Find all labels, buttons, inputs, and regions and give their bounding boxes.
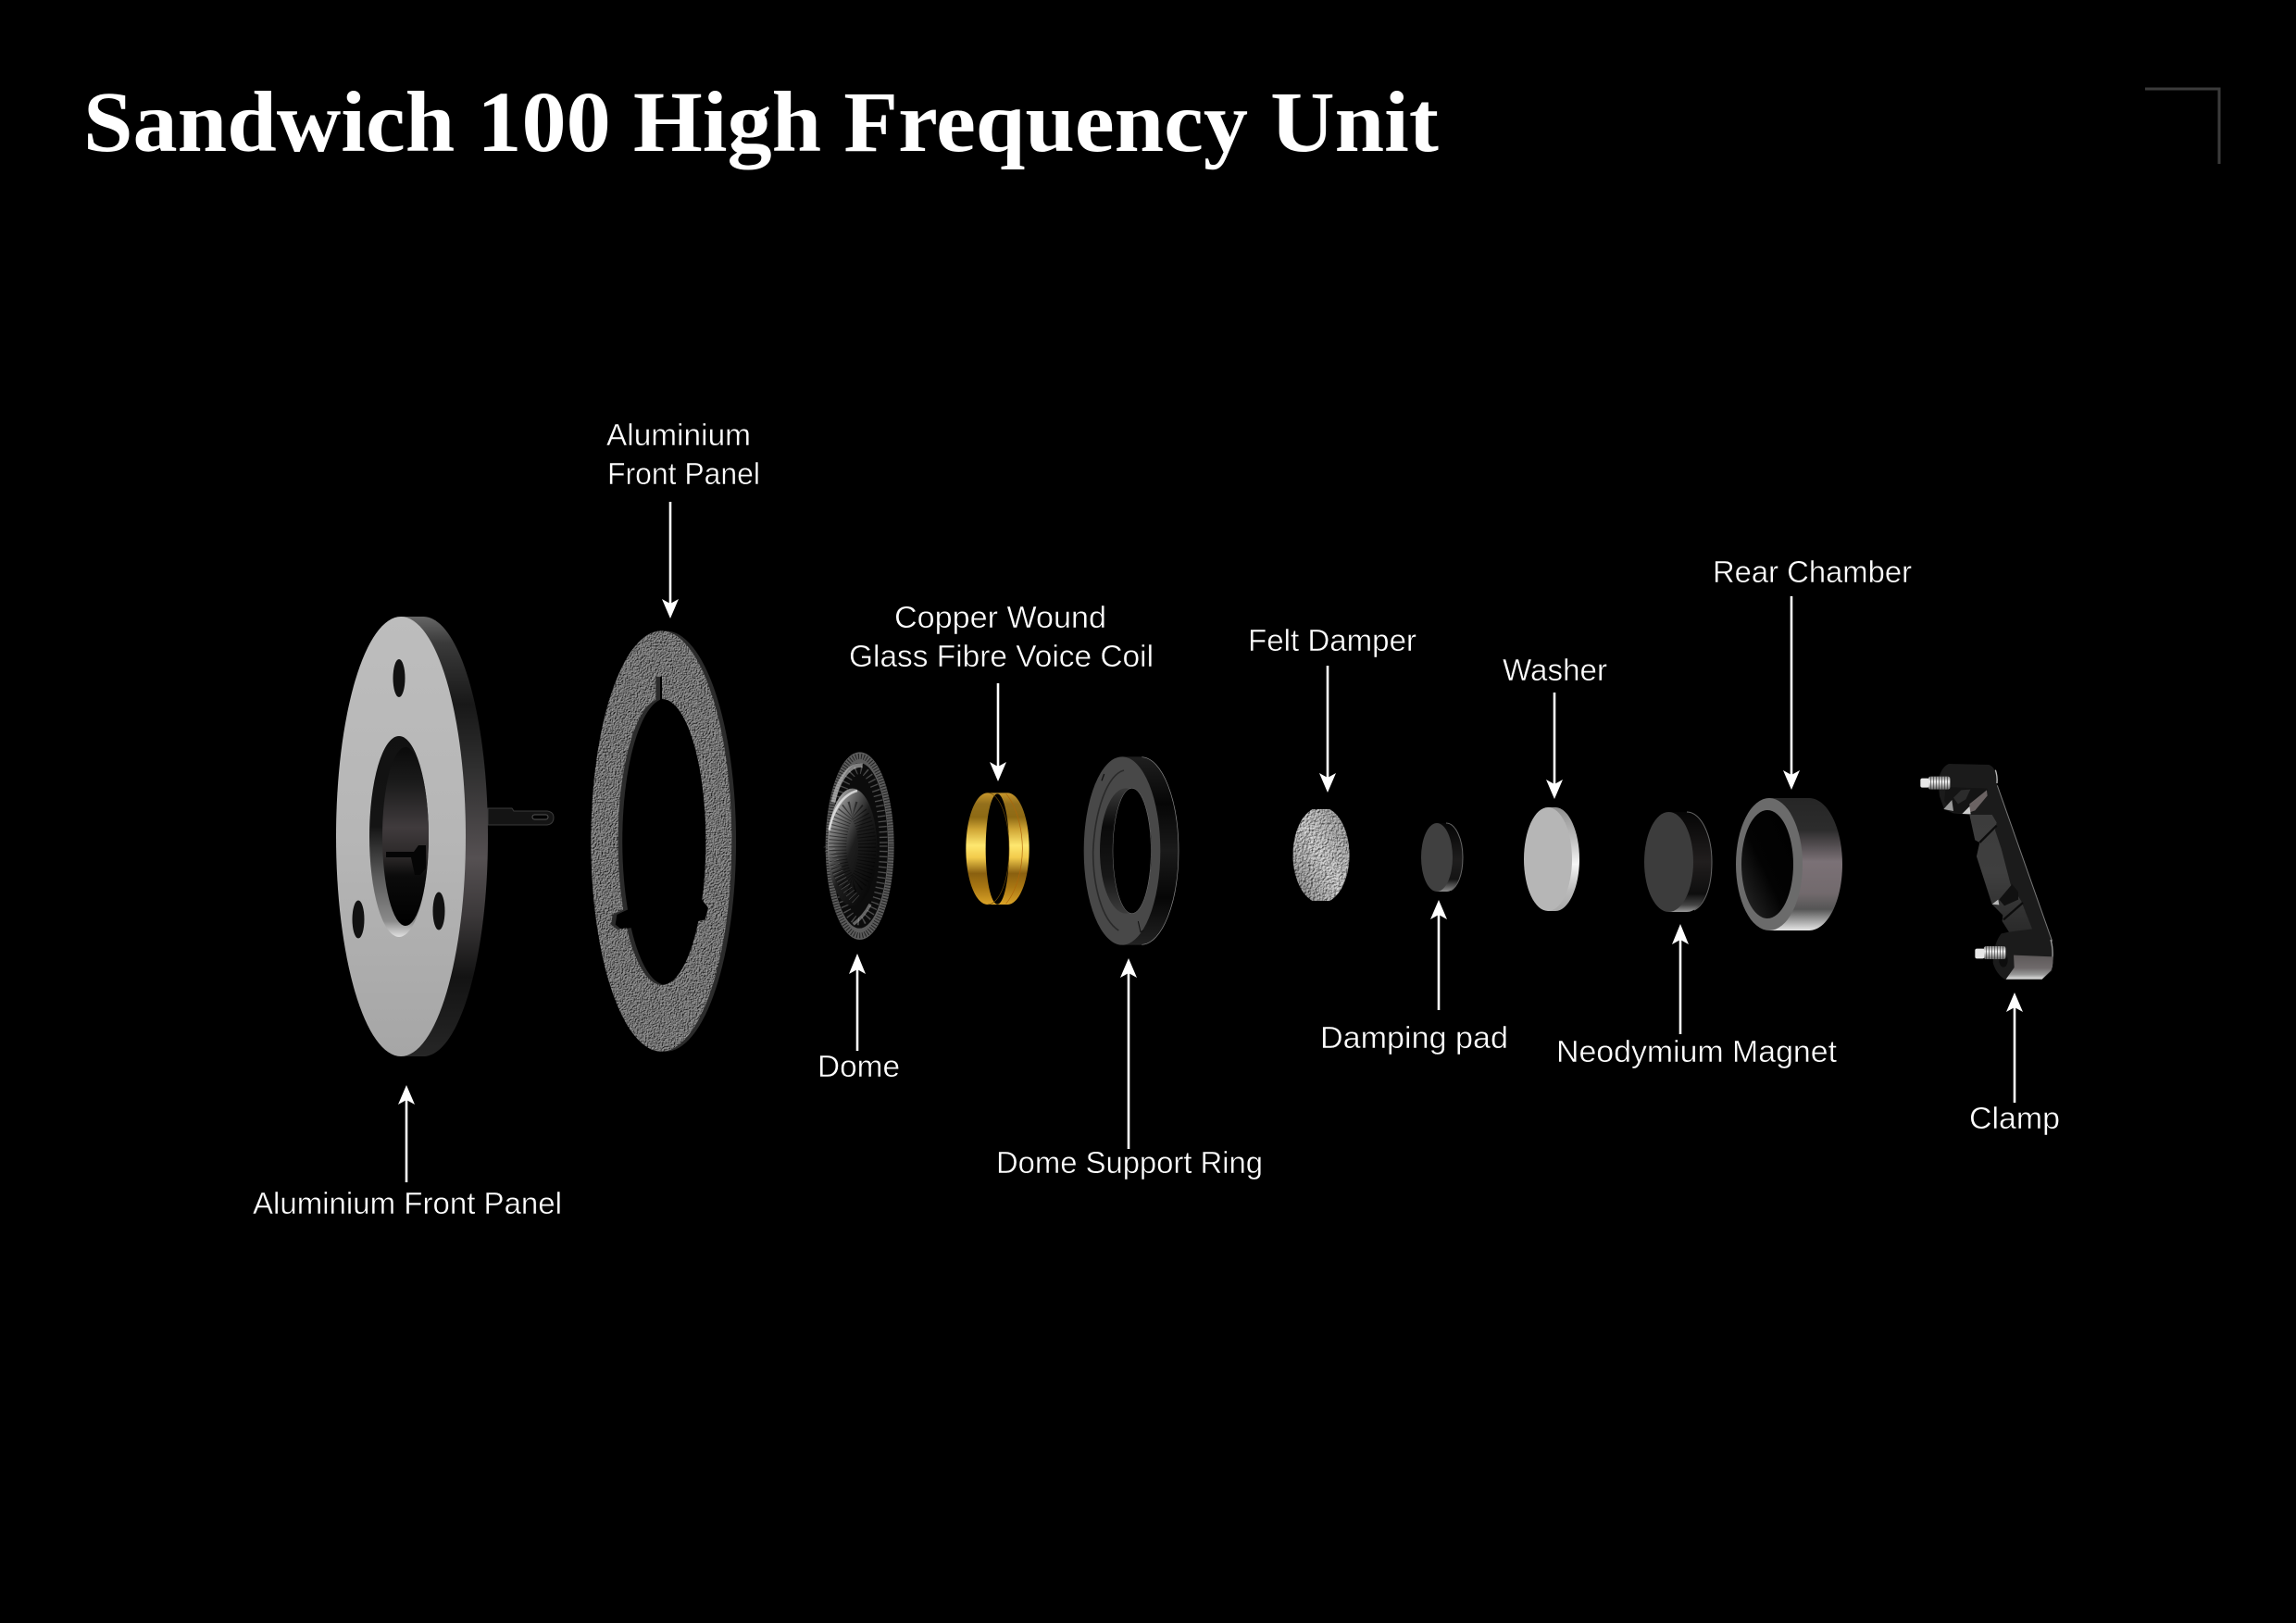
surround fine stripes xyxy=(829,756,892,935)
label: Dome xyxy=(817,1049,900,1083)
title: Sandwich 100 High Frequency Unit xyxy=(83,75,1439,170)
washer side xyxy=(1548,807,1579,911)
callout: rear chamber xyxy=(1713,555,1912,790)
magnet side xyxy=(1668,812,1712,912)
arrow up xyxy=(2006,993,2023,1103)
dome lower ribs xyxy=(829,845,856,900)
arrow up xyxy=(1430,900,1447,1010)
gasket back edge xyxy=(595,630,736,1052)
callout: washer xyxy=(1503,653,1607,799)
part: textured gasket xyxy=(591,630,736,1052)
lower lobe highlight xyxy=(2051,940,2053,968)
web groove lower xyxy=(2003,903,2023,919)
screw top thread xyxy=(1928,777,1951,790)
ring side wall xyxy=(1122,756,1179,945)
facet middle xyxy=(1962,806,1971,814)
panel face xyxy=(336,617,466,1056)
dome cap xyxy=(828,789,877,905)
ring notch top xyxy=(1102,774,1104,780)
ring step groove xyxy=(1093,770,1124,930)
suspension highlight bottom xyxy=(854,905,870,924)
dome ribs xyxy=(838,810,867,884)
inner slot xyxy=(386,845,426,875)
corner bracket xyxy=(2145,89,2219,164)
screw bottom head xyxy=(1975,949,1984,958)
magnet edge line xyxy=(1687,812,1712,910)
callout: clamp xyxy=(1969,993,2060,1135)
part: dome xyxy=(826,752,894,940)
upper pocket light xyxy=(1969,790,1988,812)
dark suspension xyxy=(831,763,888,929)
callout: neodymium magnet xyxy=(1556,924,1837,1068)
lower hole xyxy=(1999,954,2008,968)
label: Felt Damper xyxy=(1248,623,1416,657)
ring face xyxy=(1084,756,1160,945)
continuous web band xyxy=(1969,815,2032,932)
panel side wall xyxy=(401,617,488,1056)
screw hole right xyxy=(433,893,444,930)
coil lip lines xyxy=(988,793,1009,905)
thread cuts bottom xyxy=(1986,933,2006,972)
arrow down xyxy=(1783,596,1800,790)
part: washer xyxy=(1524,807,1579,911)
ring notch bottom xyxy=(1138,921,1143,932)
pad edge line xyxy=(1446,823,1463,891)
upper pocket xyxy=(1944,787,1988,813)
facet lower xyxy=(1992,900,1999,905)
screw top head xyxy=(1920,779,1929,788)
facets xyxy=(1943,800,1953,811)
thread cuts top xyxy=(1930,764,1951,803)
suspension highlight top xyxy=(833,766,863,803)
arrow down xyxy=(1546,693,1563,799)
label: Damping pad xyxy=(1320,1020,1508,1055)
arrow up xyxy=(398,1085,415,1182)
callout: felt damper xyxy=(1248,623,1416,793)
pad face xyxy=(1421,823,1453,892)
part: neodymium magnet xyxy=(1644,812,1712,912)
rear tab xyxy=(488,808,554,825)
upper pocket block xyxy=(1953,790,1970,804)
clamp plate xyxy=(1938,764,2053,980)
callout: dome xyxy=(817,954,900,1083)
arrow up xyxy=(1120,958,1137,1149)
washer face xyxy=(1524,807,1572,911)
arrow down xyxy=(662,502,679,618)
foot xyxy=(2006,955,2053,980)
coil outer silhouette xyxy=(966,793,1029,905)
web groove upper xyxy=(1979,826,1997,843)
label: Neodymium Magnet xyxy=(1556,1034,1837,1068)
arrow up xyxy=(849,954,866,1051)
arrow up xyxy=(1672,924,1689,1034)
dome surround xyxy=(826,752,894,940)
callout: damping pad xyxy=(1320,900,1508,1055)
screw bottom thread xyxy=(1984,946,2006,959)
label: Rear Chamber xyxy=(1713,555,1912,589)
label: Washer xyxy=(1503,653,1607,687)
chamber rim xyxy=(1736,798,1803,930)
part: rear chamber xyxy=(1736,798,1842,930)
label line one: Copper Wound xyxy=(894,600,1106,634)
chamber cavity xyxy=(1741,810,1793,918)
part: clamp xyxy=(1920,764,2053,980)
callout: voice coil xyxy=(849,600,1154,781)
label line two: Front Panel xyxy=(607,456,760,491)
coil opening xyxy=(986,793,1009,905)
arrow down xyxy=(990,683,1006,781)
part: damping pad xyxy=(1421,823,1463,892)
plate edge highlight xyxy=(1997,785,2053,942)
label: Dome Support Ring xyxy=(996,1145,1263,1180)
ring opening xyxy=(1113,788,1151,914)
centre opening bevel xyxy=(369,736,429,937)
dome highlight xyxy=(830,791,857,830)
magnet face xyxy=(1644,812,1693,912)
label line two: Glass Fibre Voice Coil xyxy=(849,639,1154,673)
label: Aluminium Front Panel xyxy=(253,1186,562,1220)
gasket front face xyxy=(591,630,731,1052)
chamber side xyxy=(1769,798,1842,930)
felt body xyxy=(1292,807,1350,904)
callout: aluminium front panel (lower) xyxy=(253,1085,562,1220)
centre opening inner wall xyxy=(382,747,429,926)
ring inner wall xyxy=(1100,788,1152,914)
callout: aluminium front panel (upper) xyxy=(606,418,760,618)
upper lobe highlight xyxy=(1995,770,1997,783)
label: Clamp xyxy=(1969,1101,2060,1135)
screw hole top xyxy=(393,659,406,697)
label line one: Aluminium xyxy=(606,418,751,452)
part: dome support ring xyxy=(1084,756,1179,945)
coil groove xyxy=(1006,793,1022,904)
part: copper voice coil xyxy=(966,793,1029,905)
callout: dome support ring xyxy=(996,958,1263,1180)
screw hole left xyxy=(352,900,365,939)
arrow down xyxy=(1319,666,1336,793)
lower pocket xyxy=(1999,884,2018,905)
part: aluminium front panel xyxy=(336,617,554,1056)
part: felt damper xyxy=(1292,807,1350,904)
ring highlight edge xyxy=(1142,757,1179,944)
suspension ribs xyxy=(835,770,883,921)
pad side xyxy=(1437,823,1463,892)
exploded view infographic xyxy=(88,87,2220,1215)
